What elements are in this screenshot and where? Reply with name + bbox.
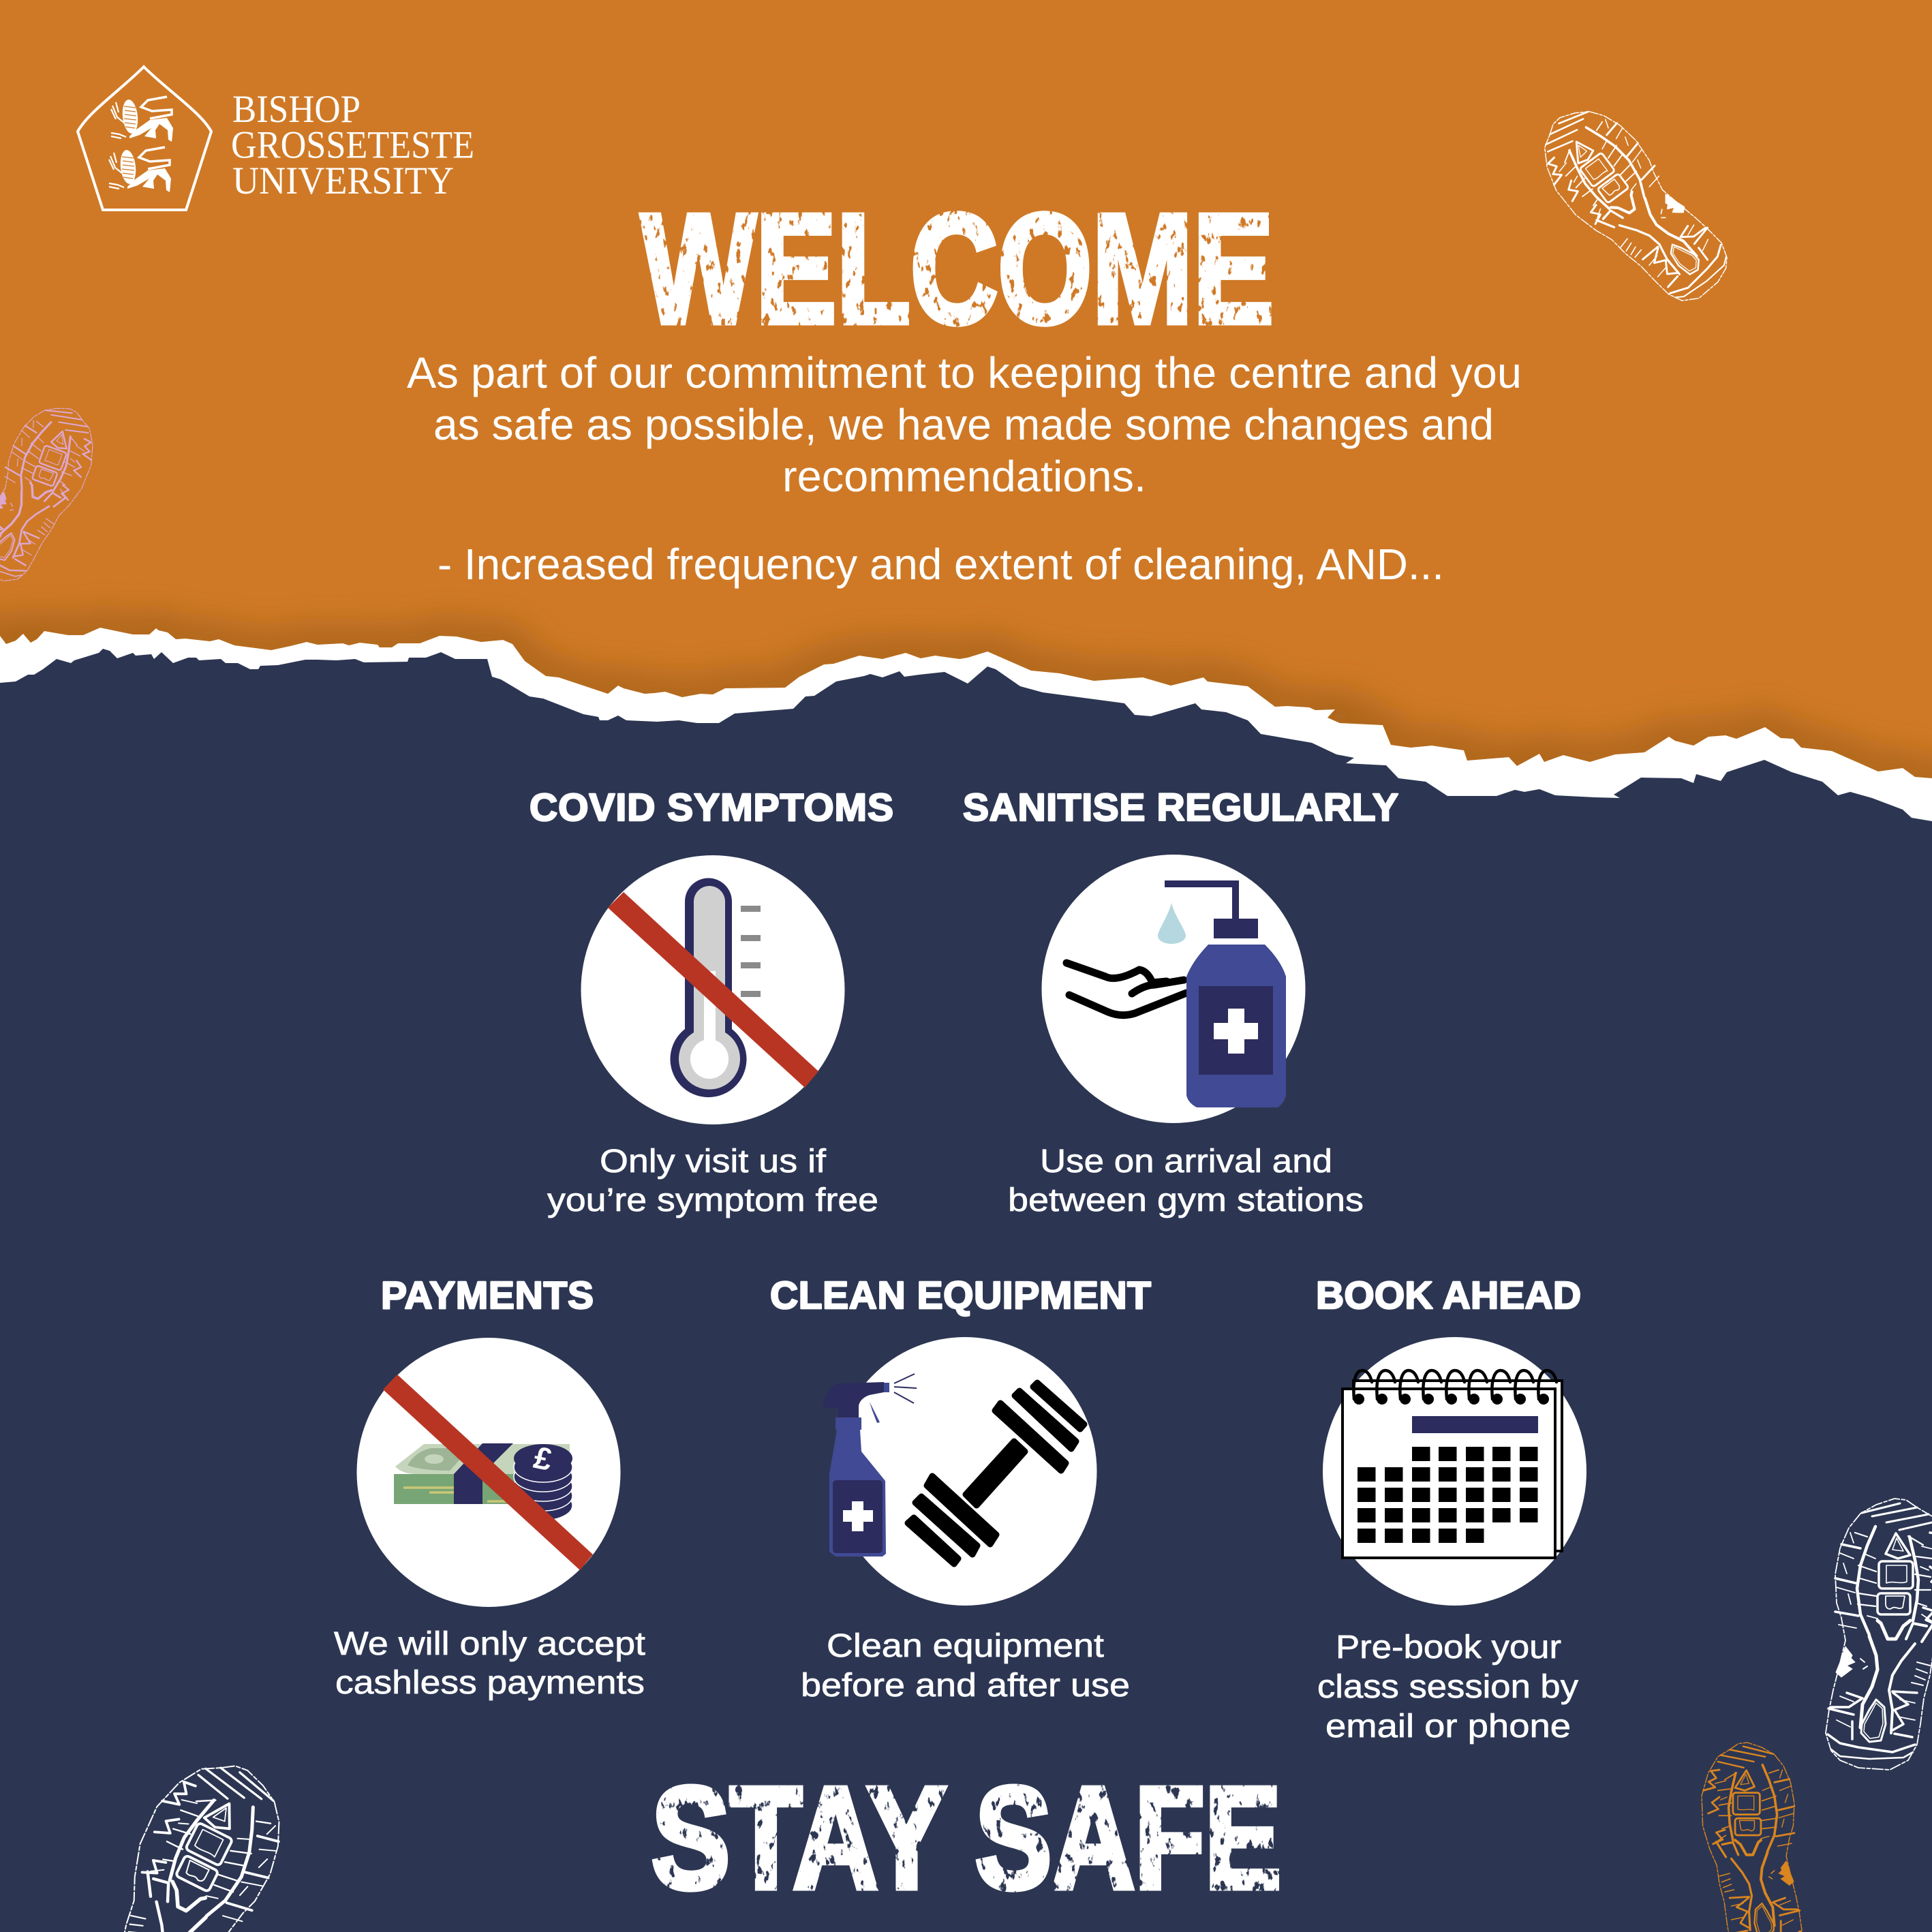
panel: sanitise regularly [963,786,1398,1218]
caption: book ahead [1317,1629,1578,1745]
icon: shoe print left pink [0,393,107,596]
intro text: recommendations. [782,452,1146,501]
heading: covid symptoms: COVID SYMPTOMS [530,786,893,829]
icon: cash crossed out [357,1338,620,1607]
crest shield outline [78,67,211,210]
icon: shoe print bottom right white [1826,1499,1932,1770]
intro text: As part of our commitment to keeping the centre and you [407,348,1522,397]
caption: book ahead: email or phone [1325,1708,1571,1745]
logo: Bishop Grosseteste University [78,67,474,210]
caption: payments [334,1626,645,1701]
heading: clean equipment: CLEAN EQUIPMENT [770,1274,1151,1317]
caption: clean equipment [801,1628,1130,1704]
torn paper: white strip [0,0,1932,821]
panel: payments [334,1274,645,1701]
icon: calendar [1323,1337,1586,1606]
lion top [111,97,173,142]
caption: sanitise regularly: Use on arrival and [1040,1144,1332,1180]
icon: hand sanitiser [1041,855,1306,1123]
intro text [407,348,1522,589]
torn paper: orange upper panel [0,0,1932,778]
icon: shoe print top right [1522,85,1740,328]
panel: book ahead [1316,1274,1586,1745]
icon: shoe print bottom right orange [1702,1743,1802,1932]
caption: payments: We will only accept [334,1626,645,1662]
icon: shoe print bottom left [57,1741,316,1932]
caption: covid symptoms: you’re symptom free [547,1182,878,1218]
caption: clean equipment: before and after use [801,1668,1130,1704]
intro text: - Increased frequency and extent of cleaning, AND... [438,540,1444,589]
icon: dumbbell and spray [823,1337,1097,1606]
caption: book ahead: class session by [1317,1669,1578,1705]
caption: covid symptoms [547,1144,878,1218]
title: STAY SAFE: SAFE [975,1757,1281,1918]
caption: clean equipment: Clean equipment [827,1628,1104,1664]
icon: cash crossed out: £ [531,1439,555,1477]
heading: book ahead: BOOK AHEAD [1316,1274,1581,1317]
icon: thermometer crossed out [581,855,845,1124]
caption: book ahead: Pre-book your [1336,1629,1561,1666]
caption: sanitise regularly [1008,1144,1364,1218]
panel: clean equipment [770,1274,1151,1704]
university name: UNIVERSITY [232,159,454,202]
panel: covid symptoms [530,786,893,1218]
title: STAY SAFE: STAY [651,1757,946,1918]
heading: payments: PAYMENTS [381,1274,594,1317]
caption: sanitise regularly: between gym stations [1008,1182,1364,1218]
title: STAY SAFE [651,1757,1281,1918]
caption: payments: cashless payments [335,1665,645,1701]
university name: GROSSETESTE [231,124,474,166]
caption: covid symptoms: Only visit us if [600,1144,827,1180]
intro text: as safe as possible, we have made some changes and [433,400,1494,449]
title: WELCOME: WELCOME [641,183,1274,356]
university name: BISHOP [232,88,361,131]
university name [231,88,474,202]
heading: sanitise regularly: SANITISE REGULARLY [963,786,1398,829]
lion bottom [109,147,171,192]
